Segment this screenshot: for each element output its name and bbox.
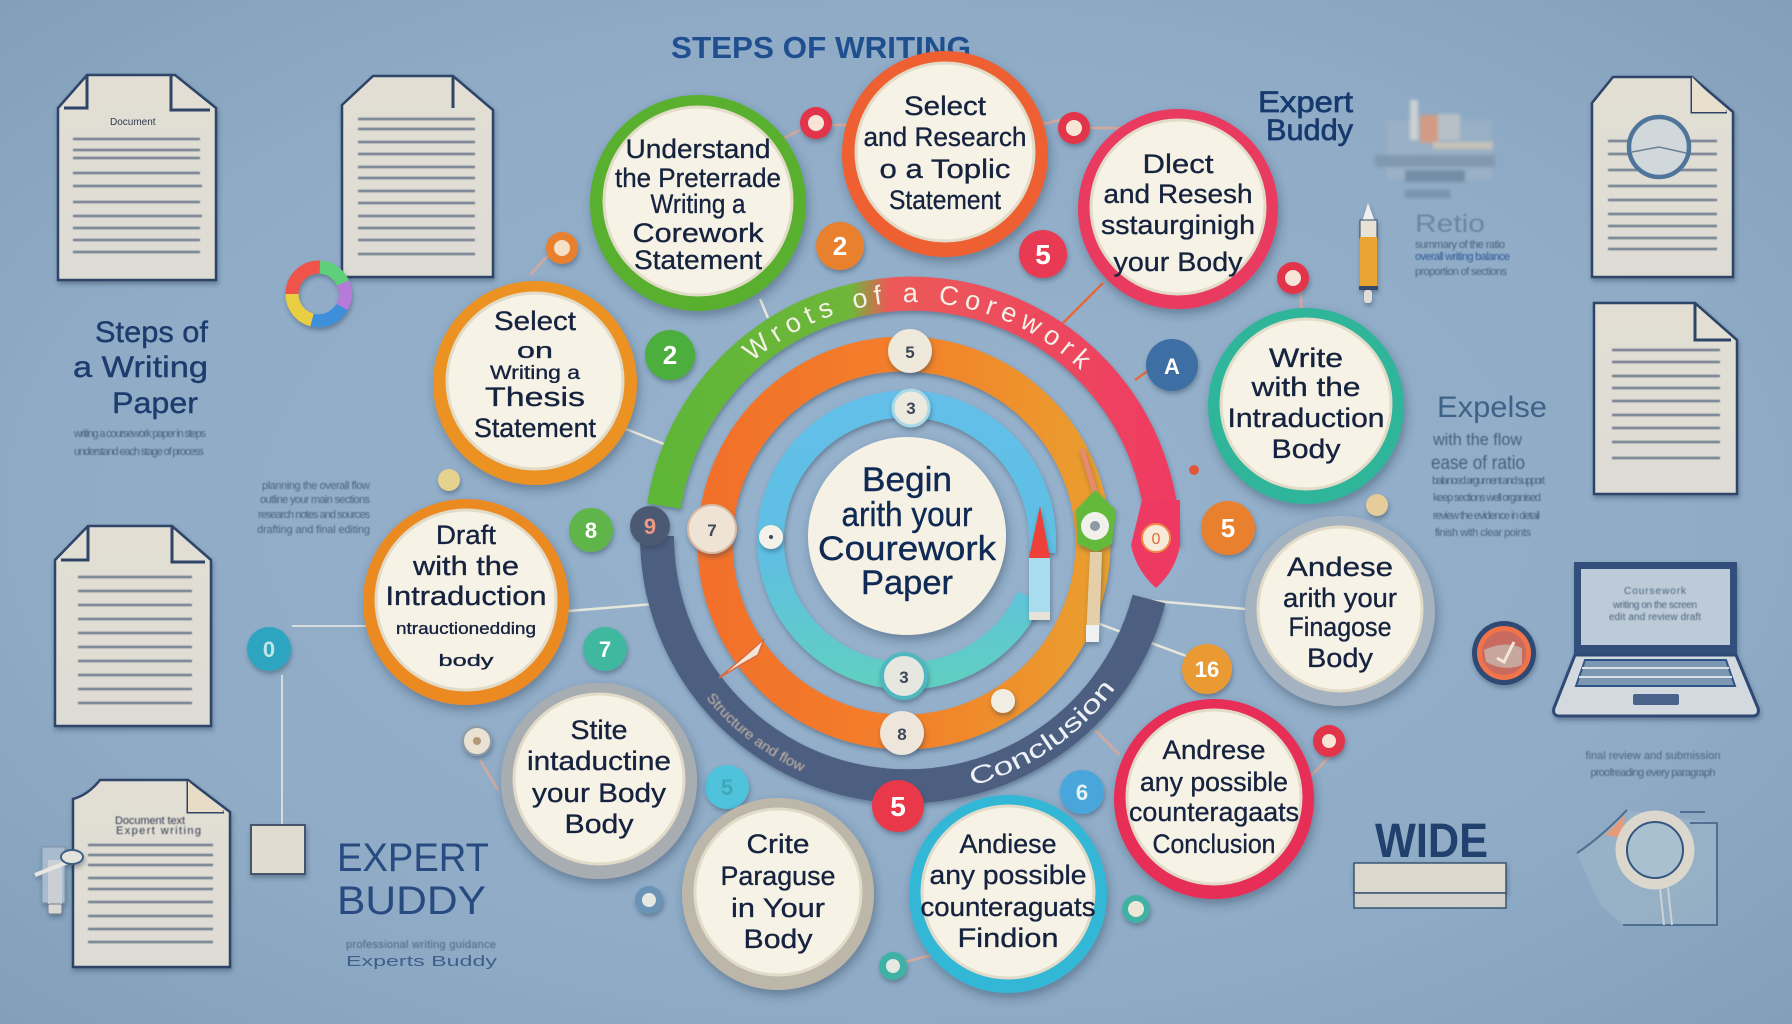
node: white dot left — [759, 525, 783, 549]
node: 3 lower: 3 — [899, 668, 909, 687]
step: andiese findion: counteraguats — [920, 892, 1096, 922]
step: understand the prelude: Understand — [626, 134, 770, 164]
laptop caption: proofreading every paragraph — [1590, 767, 1716, 779]
step: select thesis statement: Thesis — [485, 382, 585, 412]
left heading: steps of a writing paper: Steps of — [95, 316, 209, 349]
connector lines — [480, 120, 1329, 966]
ring nodes — [688, 329, 1170, 755]
dot: gold left — [438, 469, 460, 491]
document icon: bottom left: Document text — [115, 815, 185, 827]
node: 3 lower — [882, 654, 926, 698]
top-right brand: Expert — [1258, 86, 1354, 119]
step: select thesis statement: Statement — [474, 413, 596, 443]
badge: orange 16 — [1182, 644, 1232, 694]
icon: magnifier on paper — [1577, 810, 1717, 925]
step: andiese findion — [909, 795, 1107, 993]
step: select thesis statement: on — [517, 338, 553, 363]
step: draft with the introduction: Draft — [436, 520, 497, 550]
badge: green 2: 2 — [663, 340, 677, 370]
badge: blue 6: 6 — [1076, 780, 1088, 805]
icon: laptop: writing on the screen — [1612, 600, 1697, 611]
step: andese finagose body: Andese — [1287, 552, 1393, 582]
document icon: bottom left: Expert writing — [116, 825, 201, 837]
document icon: second top — [342, 76, 493, 277]
step: draft with the introduction: with the — [412, 551, 519, 581]
badge: green 8: 8 — [585, 518, 597, 543]
right text block: expelse — [1431, 391, 1547, 539]
left small text block: drafting and final editing — [257, 524, 370, 536]
faded label: ratio block: summary of the ratio — [1415, 239, 1505, 251]
centre circle — [808, 437, 1006, 635]
badge: orange 2 — [816, 222, 864, 270]
icon: laptop: edit and review draft — [1609, 612, 1701, 623]
step: stite intaductine: your Body — [532, 778, 667, 808]
step: crite paraguse: Paraguse — [720, 861, 836, 891]
ring: outer green to red — [646, 276, 1184, 588]
badge: blue A: A — [1164, 354, 1180, 379]
bottom-left brand — [337, 836, 498, 970]
laptop caption — [1586, 750, 1720, 779]
left small text block — [257, 480, 370, 536]
step: write with the introduction: Intraduction — [1228, 403, 1384, 433]
badge: green 8 — [569, 508, 613, 552]
step: andrese conclusion: Conclusion — [1152, 829, 1276, 859]
document icon: right middle — [1594, 303, 1737, 494]
badge: orange 16: 16 — [1195, 657, 1219, 682]
step: understand the prelude: the Preterrade — [615, 163, 781, 193]
badge: orange 2: 2 — [833, 231, 847, 261]
badge: green 2 — [645, 330, 695, 380]
dot: gold right — [1366, 494, 1388, 516]
badge: red 5 bottom: 5 — [890, 791, 906, 822]
step: write with the introduction: with the — [1250, 372, 1360, 402]
icon: faded machine — [1375, 100, 1495, 198]
badge: orange 0 — [546, 232, 578, 264]
faded label: ratio block — [1415, 210, 1510, 278]
step: andiese findion: Andiese — [960, 829, 1056, 859]
icon: pencil — [1359, 203, 1378, 303]
document icon: bottom left — [73, 780, 230, 967]
document icon: top left: Document — [110, 117, 156, 128]
step: direct and research: sstaurginigh — [1101, 210, 1255, 240]
step: stite intaductine: intaductine — [527, 746, 671, 776]
step: understand the prelude: Statement — [634, 245, 763, 275]
step: direct and research — [1078, 109, 1278, 309]
left heading: steps of a writing paper: understand each stage of process — [74, 446, 204, 458]
icon: red gauge — [1472, 621, 1536, 685]
top-right brand — [1258, 86, 1354, 147]
right text block: expelse: ease of ratio — [1431, 453, 1525, 474]
badge: red 0 — [800, 107, 832, 139]
centre circle: Paper — [861, 564, 953, 602]
centre circle: Courework — [818, 530, 997, 568]
step: select and research: Statement — [889, 185, 1001, 215]
icon: colour wheel — [292, 267, 345, 321]
step: select and research: o a Toplic — [880, 154, 1010, 184]
step: andese finagose body: Body — [1307, 643, 1374, 673]
step: andese finagose body — [1245, 516, 1435, 706]
left heading: steps of a writing paper: a Writing — [73, 351, 208, 384]
node: 3 upper — [893, 390, 929, 426]
faded label: ratio block: Retio — [1415, 210, 1485, 238]
laptop caption: final review and submission — [1586, 750, 1720, 762]
document icon: top left — [58, 75, 216, 280]
badge: red 5 top: 5 — [1035, 239, 1051, 270]
badge: teal 7 — [583, 627, 627, 671]
ring: dark conclusion ring: Structure and flow — [707, 693, 806, 772]
node: 8 lower: 8 — [897, 725, 907, 744]
node: 5 top — [888, 329, 932, 373]
left small text block: research notes and sources — [258, 509, 370, 521]
step: draft with the introduction: ntrauctionedding — [396, 619, 536, 638]
right text block: expelse: finish with clear points — [1435, 527, 1532, 539]
badge: teal cream small — [1122, 895, 1150, 923]
step: write with the introduction: Write — [1269, 343, 1343, 373]
badge: teal 0 — [247, 627, 291, 671]
step: select and research: Select — [904, 91, 987, 121]
badge: slate small — [635, 886, 663, 914]
centre circle: Begin — [862, 461, 952, 499]
step: direct and research: your Body — [1114, 247, 1243, 277]
badge: blue 6 — [1060, 770, 1104, 814]
badge: cream small — [463, 727, 491, 755]
step: andrese conclusion — [1114, 699, 1314, 899]
icon: clip — [35, 847, 83, 914]
step: andrese conclusion: Andrese — [1162, 735, 1266, 765]
bottom-left brand: Experts Buddy — [346, 953, 498, 970]
node: 7 left: 7 — [707, 521, 717, 540]
left small text block: planning the overall flow — [262, 480, 370, 492]
step: crite paraguse: Crite — [746, 829, 810, 859]
bottom-left brand: BUDDY — [337, 879, 486, 923]
bottom-left brand: EXPERT — [337, 836, 489, 880]
left small text block: outline your main sections — [260, 494, 370, 506]
icon: laptop: Coursework — [1624, 586, 1687, 597]
left heading: steps of a writing paper — [73, 316, 209, 458]
badge: orange 5 — [1201, 501, 1255, 555]
step: draft with the introduction: body — [438, 651, 494, 670]
step: andese finagose body: arith your — [1283, 583, 1397, 613]
icon: rocket pen — [1029, 506, 1050, 620]
node: red tip 0 — [1142, 524, 1170, 552]
step: select thesis statement: Writing a — [490, 363, 581, 384]
faded label: ratio block: overall writing balance — [1415, 251, 1510, 263]
step: understand the prelude — [590, 95, 806, 311]
badge: red 5 bottom — [872, 780, 924, 832]
badge: orange 5: 5 — [1221, 513, 1235, 543]
step: understand the prelude: Corework — [632, 218, 764, 248]
left heading: steps of a writing paper: writing a coursework paper in steps — [73, 428, 206, 440]
badge: red 5 top — [1019, 230, 1067, 278]
step: andiese findion: any possible — [930, 860, 1086, 890]
numbered badges — [247, 107, 1388, 980]
ring: blue to teal — [771, 404, 1043, 676]
step: select and research — [842, 51, 1048, 257]
right text block: expelse: review the evidence in detail — [1433, 510, 1540, 522]
node: 7 left — [688, 505, 736, 553]
step: andrese conclusion: any possible — [1140, 767, 1288, 797]
step: andese finagose body: Finagose — [1288, 612, 1392, 642]
step: write with the introduction: Body — [1272, 434, 1341, 464]
node: 5 top: 5 — [905, 343, 915, 362]
step: draft with the introduction — [363, 499, 569, 705]
node: 8 lower — [880, 711, 924, 755]
top-right brand: Buddy — [1266, 114, 1353, 147]
right text block: expelse: keep sections well organised — [1433, 492, 1541, 504]
step: understand the prelude: Writing a — [650, 189, 746, 219]
right text block: expelse: Expelse — [1437, 391, 1547, 424]
node: white dot lower right — [991, 689, 1015, 713]
badge: teal small — [879, 952, 907, 980]
step: crite paraguse: in Your — [731, 893, 825, 923]
right text block: expelse: balanced argument and support — [1432, 475, 1545, 487]
step: direct and research: Dlect — [1142, 149, 1214, 179]
document icon: top right with circle — [1592, 77, 1733, 277]
node: red tip 0: 0 — [1152, 531, 1161, 548]
centre circle: arith your — [842, 496, 972, 534]
step: draft with the introduction: Intraduction — [386, 581, 546, 611]
icon: connector box — [251, 626, 366, 874]
icon: laptop — [1554, 562, 1758, 716]
icon: green pen — [1076, 449, 1116, 642]
step: andiese findion: Findion — [958, 923, 1058, 953]
step: crite paraguse: Body — [744, 924, 813, 954]
step: write with the introduction — [1208, 308, 1404, 504]
title: STEPS OF WRITING — [671, 30, 971, 65]
badge: light blue 5 — [705, 765, 749, 809]
right text block: expelse: with the flow — [1432, 430, 1523, 449]
bottom-left brand: professional writing guidance — [346, 939, 496, 951]
left heading: steps of a writing paper: Paper — [112, 387, 198, 420]
icon: small brush — [719, 639, 764, 678]
faded label: ratio block: proportion of sections — [1415, 266, 1508, 278]
step: andrese conclusion: counteragaats — [1129, 797, 1299, 827]
step: select and research: and Research — [864, 122, 1026, 152]
step: stite intaductine: Body — [564, 809, 634, 839]
badge: dark 9: 9 — [644, 514, 656, 539]
badge: red 0 upper right — [1277, 262, 1309, 294]
step: direct and research: and Resesh — [1104, 179, 1252, 209]
wide label — [1354, 815, 1506, 908]
step: select thesis statement — [433, 281, 637, 485]
ring: outer green to red: Wrots of a Corework — [740, 284, 1090, 370]
step: crite paraguse — [682, 798, 874, 990]
badge: light blue 5: 5 — [721, 775, 733, 800]
wide label: WIDE — [1375, 815, 1488, 868]
badge: blue A — [1146, 339, 1198, 391]
step: stite intaductine — [501, 683, 697, 879]
dot: red small — [1189, 465, 1199, 475]
ring: dark conclusion ring — [638, 536, 1168, 808]
ring: dark conclusion ring: Conclusion — [970, 683, 1114, 783]
node: 3 upper: 3 — [906, 399, 916, 418]
badge: red 0 right — [1058, 112, 1090, 144]
badge: teal 0: 0 — [263, 637, 275, 662]
ring: orange — [715, 354, 1093, 732]
step: select thesis statement: Select — [494, 306, 577, 336]
badge: red small — [1313, 725, 1345, 757]
step: stite intaductine: Stite — [570, 715, 628, 745]
badge: dark 9 — [630, 506, 670, 546]
document icon: left middle — [55, 526, 211, 726]
badge: teal 7: 7 — [599, 637, 611, 662]
